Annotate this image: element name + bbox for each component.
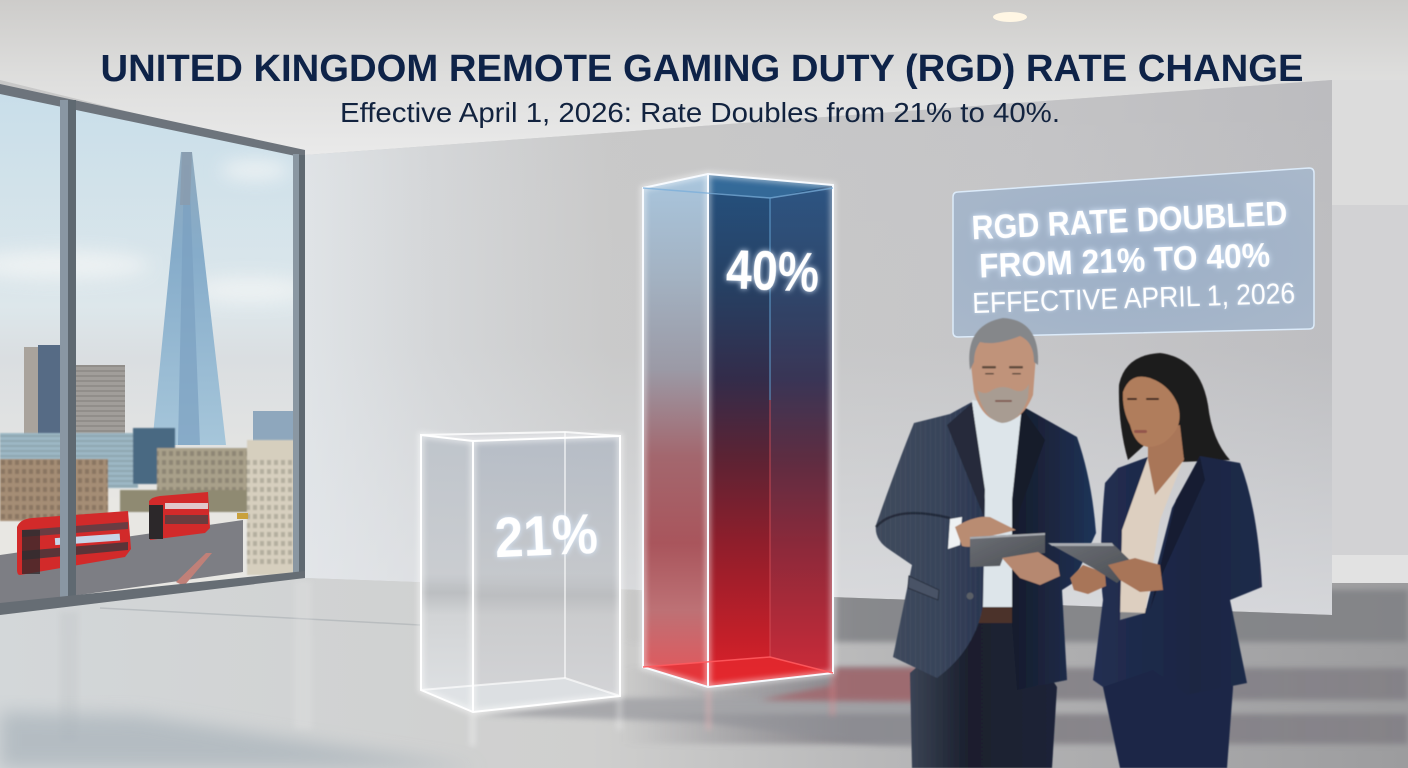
shirt cuff <box>948 517 962 549</box>
woman with tablet <box>1048 353 1262 768</box>
jacket right panel and arm <box>1012 406 1096 690</box>
callout date: EFFECTIVE APRIL 1, 2026 <box>972 278 1296 320</box>
belt <box>972 607 1013 623</box>
lower tablet hand <box>1070 565 1106 594</box>
hair <box>969 318 1038 370</box>
buildings behind the Shard <box>24 345 294 441</box>
clouds <box>0 160 310 302</box>
bar: 40% <box>643 174 833 687</box>
subtitle: Effective April 1, 2026: Rate Doubles from 21% to 40%. <box>340 97 1060 128</box>
face <box>970 332 1036 422</box>
red double-decker buses <box>17 492 210 575</box>
face <box>1123 377 1180 447</box>
label: 40%: 40% <box>725 237 820 304</box>
trousers <box>1103 640 1233 768</box>
callout panel <box>953 168 1314 337</box>
neck <box>1148 425 1184 495</box>
sleeve crease and pocket flap <box>876 513 974 600</box>
window frames <box>0 84 305 615</box>
label: 21%: 21% <box>493 502 599 570</box>
jacket <box>1093 456 1262 695</box>
title: UNITED KINGDOM REMOTE GAMING DUTY (RGD) RATE CHANGE <box>100 48 1304 90</box>
eyes and mouth <box>1127 398 1159 433</box>
pinstripe overlay <box>876 402 985 678</box>
callout heading line 2: FROM 21% TO 40% <box>978 236 1271 286</box>
bar: 21% <box>421 432 620 712</box>
jacket left panel and arm <box>876 402 985 678</box>
distant traffic and railing <box>176 513 248 586</box>
man with tablet <box>876 318 1096 768</box>
tablet <box>970 533 1045 567</box>
trousers <box>910 620 1057 768</box>
lapels <box>947 403 1045 528</box>
tablet <box>1048 543 1135 583</box>
brows, eyes and mouth <box>982 366 1023 402</box>
lapel shading <box>1150 457 1205 610</box>
holding hand <box>1002 552 1060 585</box>
neck <box>978 385 1020 413</box>
upper hand <box>1108 558 1163 592</box>
pointing hand <box>955 517 1016 547</box>
The Shard <box>152 152 226 445</box>
road <box>0 520 243 606</box>
shirt <box>972 400 1023 608</box>
foreground city blocks <box>0 428 297 575</box>
callout heading line 1: RGD RATE DOUBLED <box>971 195 1288 247</box>
beard <box>977 384 1029 423</box>
hair <box>1119 353 1230 462</box>
blouse <box>1117 458 1184 613</box>
window with London skyline <box>0 84 310 615</box>
ceiling light <box>993 12 1027 22</box>
bar reflections on floor <box>470 676 835 746</box>
